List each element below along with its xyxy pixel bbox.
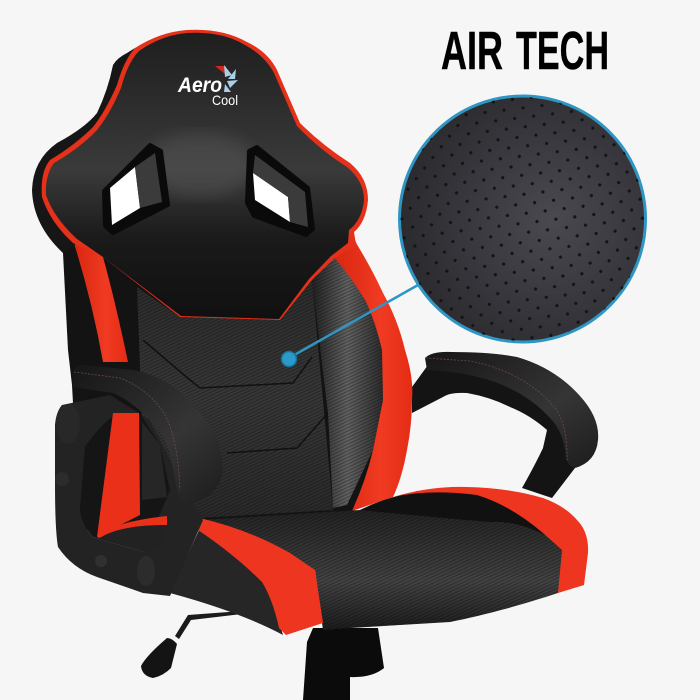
logo wordmark: Cool: Cool xyxy=(212,92,238,108)
left arm frame xyxy=(55,395,203,596)
title: AIR xyxy=(441,22,503,81)
headrest shell xyxy=(32,30,368,320)
headrest red piping xyxy=(42,30,368,320)
mesh through arm opening xyxy=(142,422,167,500)
seat left black side xyxy=(170,528,283,635)
left armrest xyxy=(55,365,223,596)
right arm stitching xyxy=(426,358,567,462)
left headrest slot xyxy=(104,145,168,233)
frame screw left xyxy=(55,472,69,486)
seat through arm opening xyxy=(100,525,167,552)
right headrest slot xyxy=(247,147,313,235)
callout connector line xyxy=(289,285,418,358)
seat rear right bolster xyxy=(360,490,545,535)
red strip seen through arm xyxy=(97,413,140,537)
red seat band through arm xyxy=(97,516,167,538)
leather texture close-up circle xyxy=(400,96,646,342)
headrest black cover xyxy=(46,33,364,319)
seat right red bolster xyxy=(393,487,588,593)
height adjustment lever xyxy=(141,611,242,678)
brand logo xyxy=(177,65,238,108)
center mesh panel xyxy=(137,280,333,518)
upper chevron seam xyxy=(143,340,312,388)
title xyxy=(441,22,609,81)
perforation dots xyxy=(400,97,644,341)
arm opening backing xyxy=(80,413,170,552)
left arm stitching xyxy=(74,372,180,490)
headrest outer black shell xyxy=(32,48,135,253)
right side mesh panel xyxy=(312,258,383,508)
seat cushion xyxy=(200,490,565,630)
right red side strip xyxy=(333,238,412,511)
frame screw bottom xyxy=(95,555,107,567)
right armrest xyxy=(412,352,598,498)
pivot knob lower xyxy=(137,556,155,586)
seat xyxy=(170,487,588,635)
seat left red bolster xyxy=(198,518,323,635)
chair back body xyxy=(60,200,400,530)
gas lift column xyxy=(303,628,384,700)
logo pinwheel icon xyxy=(215,65,238,92)
pivot knob upper xyxy=(56,404,80,444)
right arm pad xyxy=(425,352,598,468)
callout anchor dot xyxy=(282,352,296,366)
lower chevron seam xyxy=(227,413,328,453)
lever knob xyxy=(141,638,177,678)
logo wordmark: Aero: Aero xyxy=(177,74,222,97)
headrest sheen xyxy=(145,133,255,197)
left arm pad xyxy=(72,365,223,505)
right arm support xyxy=(412,365,575,498)
title: TECH xyxy=(516,22,609,81)
left red side strip xyxy=(73,240,128,362)
